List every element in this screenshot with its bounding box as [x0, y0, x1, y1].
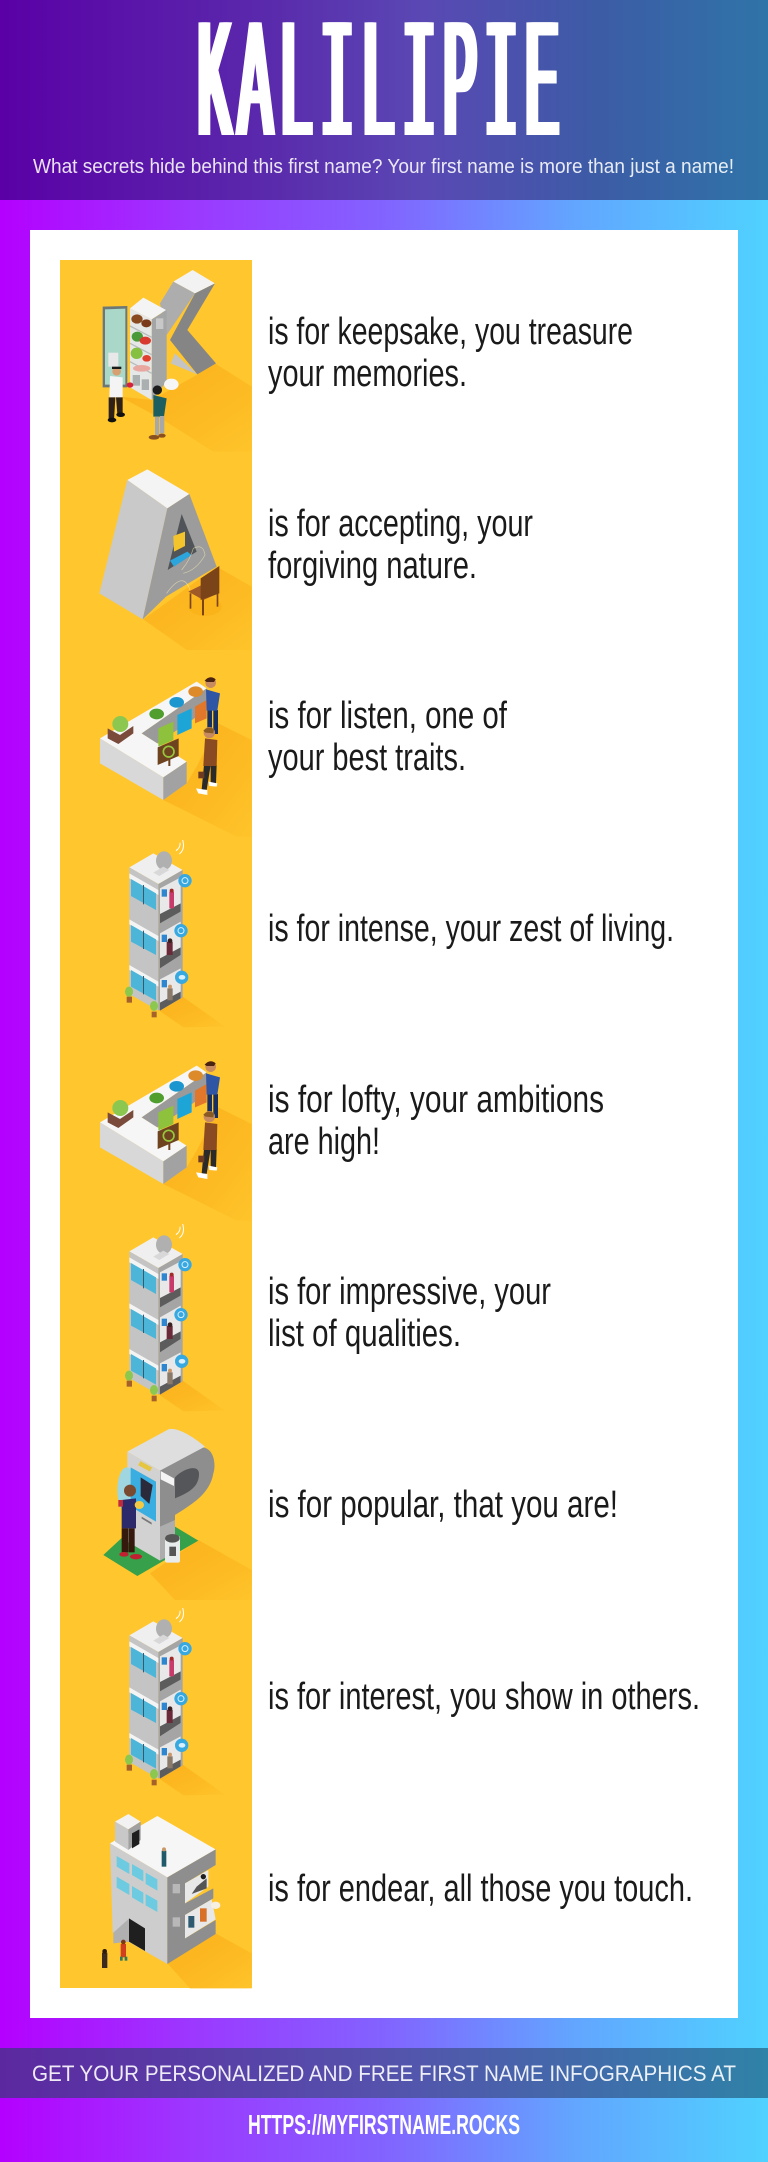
line: traits: your best traits. — [268, 737, 466, 779]
line: high: are high! — [268, 1121, 380, 1163]
illustration: letter A — [99, 469, 252, 650]
line: keepsake: is for keepsake, you treasure — [268, 311, 633, 353]
row I second — [125, 1224, 551, 1411]
illustration: letter I tower — [125, 1608, 225, 1795]
line: popular: is for popular, that you are! — [268, 1484, 618, 1526]
line: listen: is for listen, one of — [268, 695, 507, 737]
illustration: letter L recycling — [100, 677, 252, 837]
yellow image column — [60, 260, 252, 1988]
line: forgiving: forgiving nature. — [268, 545, 477, 587]
illustration: letter I tower — [125, 1224, 225, 1411]
header band — [0, 0, 768, 200]
row I — [125, 840, 674, 1027]
line: lofty: is for lofty, your ambitions — [268, 1079, 604, 1121]
footer url: HTTPS://MYFIRSTNAME.ROCKS — [248, 2109, 520, 2140]
row I third — [125, 1608, 700, 1795]
line: impressive: is for impressive, your — [268, 1271, 551, 1313]
panel: white card — [30, 230, 738, 2018]
line: accepting: is for accepting, your — [268, 503, 533, 545]
line: qualities: list of qualities. — [268, 1313, 461, 1355]
illustration: letter L recycling — [100, 1061, 252, 1221]
row E — [102, 1814, 693, 1988]
row P — [103, 1429, 618, 1600]
illustration: letter K fridge — [103, 270, 252, 452]
footer band — [0, 2048, 768, 2098]
illustration: letter E building — [102, 1814, 252, 1988]
subtitle: What secrets hide behind this first name? Your first name is more than just a name! — [33, 156, 734, 178]
footer call to action: GET YOUR PERSONALIZED AND FREE FIRST NAME INFOGRAPHICS AT — [32, 2061, 736, 2086]
row A — [99, 469, 533, 650]
row L second — [100, 1061, 604, 1221]
row K — [103, 270, 633, 452]
illustration: letter P ATM — [103, 1429, 252, 1600]
line: memories: your memories. — [268, 353, 467, 395]
row L — [100, 677, 507, 837]
illustration: letter I tower — [125, 840, 225, 1027]
